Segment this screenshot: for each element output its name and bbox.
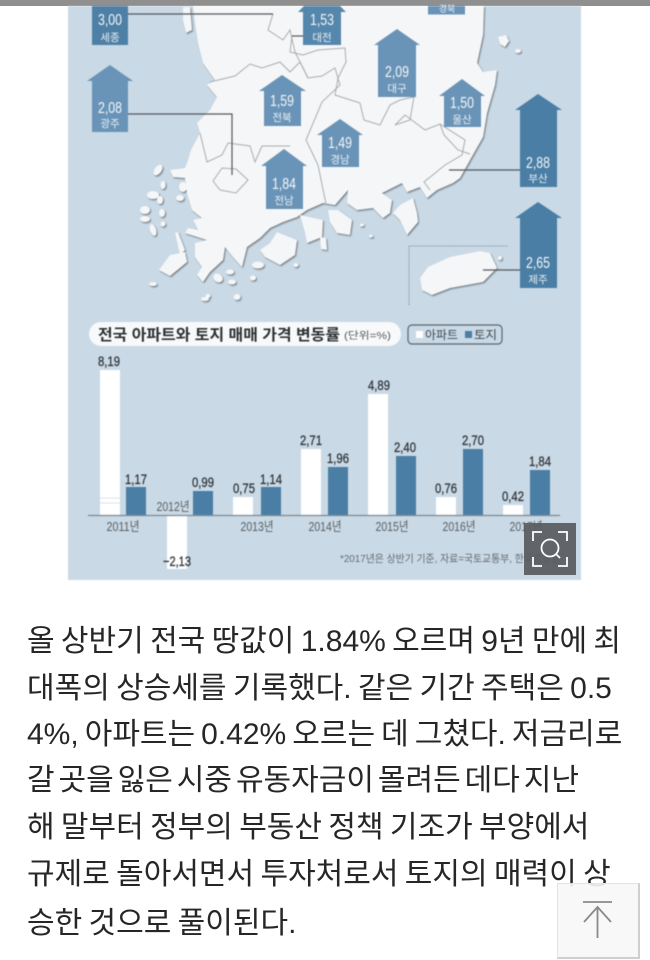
2017 bars bbox=[502, 453, 551, 534]
2015 bars: 2015년 bbox=[376, 519, 408, 534]
2014 bars: 2014년 bbox=[308, 519, 342, 534]
2017 bars: 0,42 bbox=[502, 488, 524, 504]
article body text: 올 상반기 전국 땅값이 1.84% 오르며 9년 만에 최 bbox=[27, 625, 621, 658]
2013 bars bbox=[233, 471, 282, 534]
Jeju inset dotted frame bbox=[409, 246, 508, 305]
2016 bars: 2,70 bbox=[462, 432, 484, 448]
2013 bars: 0,75 bbox=[233, 480, 255, 496]
arrow: 전남 1.84: 전남 bbox=[274, 195, 294, 207]
infographic panel: map and chart bbox=[68, 3, 582, 580]
arrow: 세종 3.00: 세종 bbox=[100, 32, 120, 44]
arrow: 경남 1.49 bbox=[317, 119, 363, 167]
icon: magnifier in corner brackets bbox=[532, 531, 568, 567]
article body text: 승한 것으로 풀이된다. bbox=[27, 907, 296, 940]
arrow: 전남 1.84: 1,84 bbox=[272, 176, 296, 193]
arrow: 대구 2.09: 2,09 bbox=[385, 64, 409, 81]
bar chart: apartment and land price change bbox=[88, 353, 560, 569]
article body text: 규제로 돌아서면서 투자처로서 토지의 매력이 상 bbox=[27, 858, 611, 891]
chart footnote: *2017년은 상반기 기준, 자료=국토교통부, 한국감정원 bbox=[340, 553, 560, 565]
arrow: 전북 1.59 bbox=[259, 75, 306, 126]
2013 bars: 2013년 bbox=[240, 519, 274, 534]
arrow: 대전 1.53: 대전 bbox=[312, 32, 332, 44]
arrow: 제주 2.65 bbox=[515, 202, 562, 288]
chart legend bbox=[408, 325, 502, 344]
arrow: 세종 3.00: 3,00 bbox=[98, 12, 122, 29]
2013 bars: 1,14 bbox=[260, 471, 282, 487]
arrow: 대구 2.09 bbox=[374, 29, 420, 97]
chart legend: 아파트 bbox=[425, 328, 458, 342]
province borders bbox=[200, 14, 470, 204]
article body text bbox=[27, 625, 622, 940]
arrow: 대구 2.09: 대구 bbox=[387, 83, 407, 95]
arrow: 경남 1.49: 경남 bbox=[330, 153, 350, 166]
chart legend: 토지 bbox=[474, 328, 497, 342]
image zoom button bbox=[524, 523, 576, 575]
2015 bars: 2,40 bbox=[394, 439, 416, 455]
arrow: 세종 3.00 bbox=[92, 6, 128, 45]
2015 bars: 4,89 bbox=[368, 377, 390, 393]
2012 bars: 2012년 bbox=[156, 499, 190, 514]
scroll to top button bbox=[557, 883, 640, 959]
2014 bars: 2,71 bbox=[300, 432, 322, 448]
arrow: 부산 2.88: 부산 bbox=[528, 173, 548, 185]
2011 bars: 1,17 bbox=[125, 471, 147, 487]
arrow: 경북 bbox=[428, 3, 465, 14]
arrow: 전북 1.59: 전북 bbox=[272, 112, 292, 124]
icon: up arrow with bar bbox=[583, 901, 612, 938]
arrow: 부산 2.88 bbox=[515, 94, 562, 187]
arrow: 광주 2.08 bbox=[87, 65, 133, 132]
arrow: 경북: 경북 bbox=[439, 3, 455, 14]
article body text: 4%, 아파트는 0.42% 오르는 데 그쳤다. 저금리로 bbox=[27, 718, 622, 751]
chart title pill: 전국 아파트와 토지 매매 가격 변동률 bbox=[98, 326, 340, 344]
map of southern Korea bbox=[140, 6, 521, 301]
article body text: 해 말부터 정부의 부동산 정책 기조가 부양에서 bbox=[27, 811, 589, 844]
arrow: 대전 1.53: 1,53 bbox=[310, 12, 334, 29]
arrow: 울산 1.50 bbox=[439, 79, 485, 127]
chart title pill bbox=[89, 322, 401, 346]
2012 bars: −2,13 bbox=[163, 553, 191, 569]
2016 bars: 2016년 bbox=[442, 519, 476, 534]
arrow: 부산 2.88: 2,88 bbox=[526, 155, 550, 172]
arrow: 광주 2.08: 광주 bbox=[100, 118, 120, 130]
2015 bars bbox=[368, 377, 416, 534]
2011 bars: 2011년 bbox=[106, 519, 140, 534]
2011 bars bbox=[98, 353, 147, 534]
chart title pill: (단위=%) bbox=[344, 329, 391, 342]
2014 bars bbox=[300, 432, 349, 534]
2017 bars: 2017년 bbox=[510, 519, 542, 534]
2012 bars bbox=[156, 474, 214, 569]
arrow: 전남 1.84 bbox=[261, 149, 307, 209]
leader lines bbox=[128, 14, 520, 270]
2012 bars: 0,99 bbox=[192, 474, 214, 490]
2014 bars: 1,96 bbox=[327, 450, 349, 466]
arrow: 경남 1.49: 1,49 bbox=[328, 135, 352, 152]
arrow: 제주 2.65: 제주 bbox=[528, 274, 548, 286]
arrow: 대전 1.53 bbox=[298, 6, 346, 45]
arrow: 울산 1.50: 1,50 bbox=[450, 95, 474, 112]
arrow: 전북 1.59: 1,59 bbox=[270, 93, 294, 110]
2017 bars: 1,84 bbox=[529, 453, 551, 469]
top grey bar bbox=[0, 0, 650, 6]
arrow: 제주 2.65: 2,65 bbox=[526, 255, 550, 272]
article body text: 대폭의 상승세를 기록했다. 같은 기간 주택은 0.5 bbox=[27, 672, 612, 705]
2016 bars: 0,76 bbox=[435, 480, 457, 496]
2011 bars: 8,19 bbox=[98, 353, 120, 369]
arrow: 울산 1.50: 울산 bbox=[452, 114, 472, 126]
2016 bars bbox=[435, 432, 484, 534]
article body text: 갈 곳을 잃은 시중 유동자금이 몰려든 데다 지난 bbox=[27, 764, 579, 797]
arrow: 광주 2.08: 2,08 bbox=[98, 100, 122, 117]
